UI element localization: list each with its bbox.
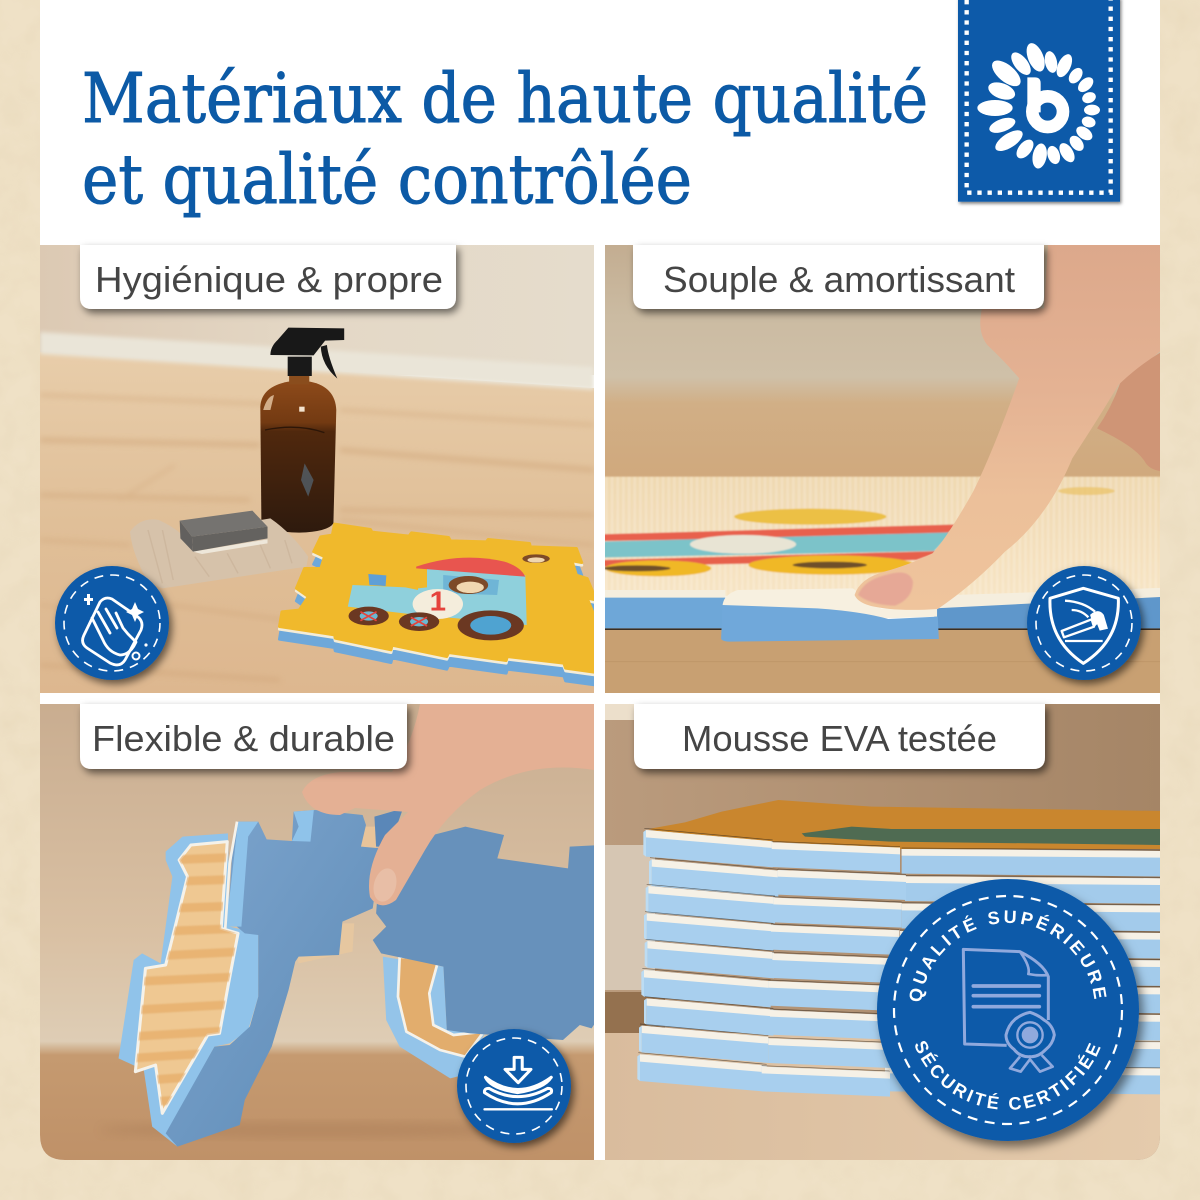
top orange tile [648, 800, 1165, 849]
pressed foam tile [723, 588, 937, 618]
label: Hygiénique & propre: Hygiénique & propre [95, 259, 443, 300]
hand [302, 704, 594, 905]
quality seal badge [874, 878, 1150, 1154]
main blue face right [373, 827, 602, 1040]
finger and hand [855, 242, 1168, 610]
panel: hygienic photo [40, 245, 602, 693]
label: Mousse EVA testée [634, 704, 1045, 769]
seal text: QUALITÉ SUPÉRIEURE [910, 910, 1106, 1002]
wood grain [41, 393, 593, 516]
tabs [361, 826, 376, 848]
icon: certificate [963, 949, 1054, 1072]
spray bottle [260, 328, 344, 533]
blocks [902, 848, 1160, 876]
baseboard [40, 332, 594, 390]
near light blue side [119, 833, 258, 1147]
far orange side [383, 957, 486, 1078]
title [82, 60, 928, 220]
label: Souple & amortissant: Souple & amortissant [663, 259, 1015, 300]
label: Souple & amortissant [633, 245, 1044, 309]
train: 1 [430, 587, 446, 617]
quality seal badge: SÉCURITÉ CERTIFIÉE [915, 1041, 1101, 1110]
panel: tested EVA foam photo [605, 704, 1200, 1160]
wall and floor background [605, 245, 1160, 485]
icon: compression badge [457, 1029, 571, 1143]
icon: wipe hand badge [55, 566, 169, 680]
label: Hygiénique & propre [80, 245, 456, 309]
logo tag [958, 0, 1120, 202]
panel: flexible durable photo [40, 704, 602, 1160]
label: Flexible & durable [80, 704, 407, 769]
floor [40, 352, 594, 693]
floor [605, 1033, 1160, 1160]
orange face with stripes [135, 842, 238, 1113]
mat top surface [601, 477, 1168, 597]
main blue face left [166, 810, 381, 1147]
wall [40, 245, 594, 375]
wall lower left [605, 845, 655, 990]
foam edge left [601, 590, 725, 598]
title: Matériaux de haute qualité [82, 60, 928, 139]
shelf [605, 992, 665, 1034]
label: Flexible & durable: Flexible & durable [92, 718, 395, 759]
title: et qualité contrôlée [82, 141, 692, 220]
foam puzzle tile with train [279, 524, 602, 686]
flexed foam tile [119, 808, 602, 1147]
icon: shield with hammer badge [1027, 566, 1141, 680]
train [348, 554, 550, 640]
wood floor [601, 630, 1168, 697]
label: Mousse EVA testée: Mousse EVA testée [682, 718, 997, 759]
blurred background [40, 704, 594, 1160]
puzzle stack [637, 800, 1200, 1097]
cream strip top left [605, 704, 635, 720]
foam edge right [934, 588, 1168, 608]
panel: soft cushioning photo [601, 242, 1168, 697]
cloth and sponge [130, 511, 308, 588]
